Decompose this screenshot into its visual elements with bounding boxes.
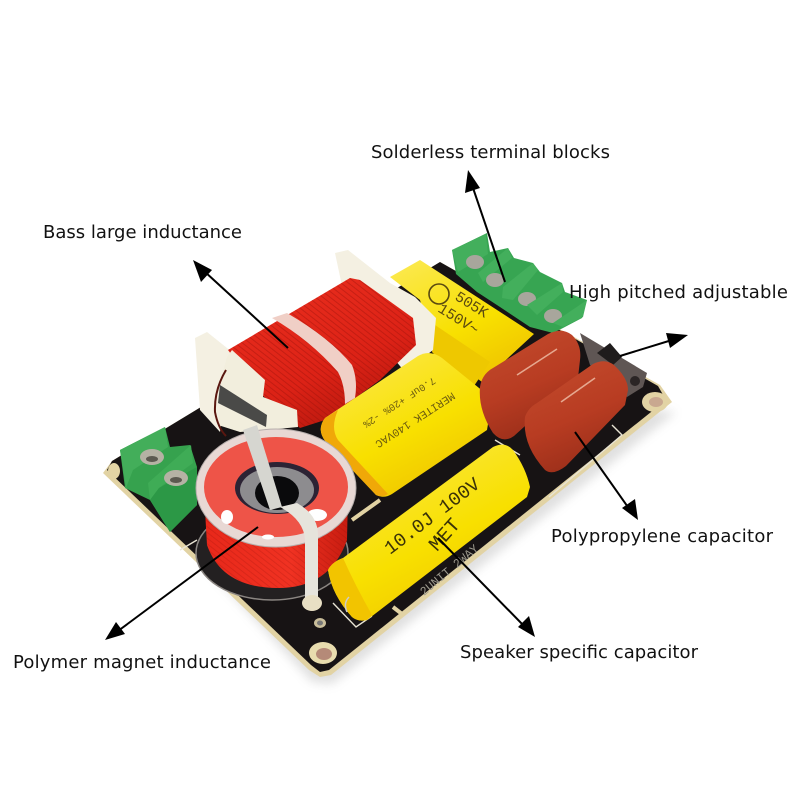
yellow capacitor 7.0uF (321, 353, 490, 497)
arrow: polypropylene capacitor (575, 432, 638, 520)
front bobbin (218, 350, 298, 432)
bottom flange (196, 506, 348, 600)
yellow capacitor 505K: 150V~ (434, 301, 482, 339)
red winding (204, 437, 348, 537)
label: Polymer magnet inductance: Polymer magnet inductance (13, 652, 271, 673)
arrow: to switch (620, 333, 688, 356)
back bobbin flange (335, 250, 436, 372)
cable tie top (243, 425, 282, 510)
yellow capacitor 505K (390, 260, 534, 392)
cable tie (272, 313, 356, 404)
holder for switch (580, 333, 647, 397)
rear capacitor (480, 331, 580, 439)
gray winding window (218, 385, 267, 427)
coil body (205, 495, 348, 588)
label: Solderless terminal blocks: Solderless terminal blocks (371, 142, 610, 163)
top flange (196, 429, 356, 547)
arrow: polymer inductor (105, 527, 258, 640)
switch (597, 343, 622, 365)
label: High pitched adjustable: High pitched adjustable (569, 282, 788, 303)
arrow: speaker capacitor (438, 538, 535, 637)
yellow capacitor 7.0uF: 7.0uF +20% -2% (360, 374, 437, 429)
core (235, 462, 319, 514)
right terminal blocks (452, 233, 587, 333)
yellow capacitor 10.0J 100V: MET (425, 515, 466, 557)
yellow capacitor 10.0J 100V (328, 445, 530, 621)
arrow: to terminal blocks (465, 170, 505, 282)
label: Polypropylene capacitor: Polypropylene capacitor (551, 526, 774, 547)
brown polypropylene capacitors (480, 331, 628, 472)
yellow capacitor 10.0J 100V: 10.0J 100V (380, 473, 485, 560)
cable tie front (280, 503, 318, 600)
arrow: to bass inductor (193, 260, 288, 348)
lead wire (215, 370, 226, 436)
board print 2UNIT 2WAY: 2UNIT 2WAY (418, 542, 482, 599)
front capacitor (525, 361, 628, 472)
board silkscreen (180, 425, 622, 627)
label: Bass large inductance: Bass large inductance (43, 222, 242, 243)
bass large inductor (195, 250, 436, 436)
circuit board (103, 262, 676, 684)
yellow capacitor 505K: 505K (451, 289, 491, 322)
label: Speaker specific capacitor: Speaker specific capacitor (460, 642, 699, 663)
yellow capacitor 7.0uF: MERITEK 140VAC (372, 389, 456, 449)
copper coil (228, 278, 416, 428)
left terminal block (120, 427, 197, 532)
polymer magnet inductor (196, 425, 356, 611)
left bobbin flange (195, 332, 232, 432)
mounting holes (309, 642, 337, 664)
